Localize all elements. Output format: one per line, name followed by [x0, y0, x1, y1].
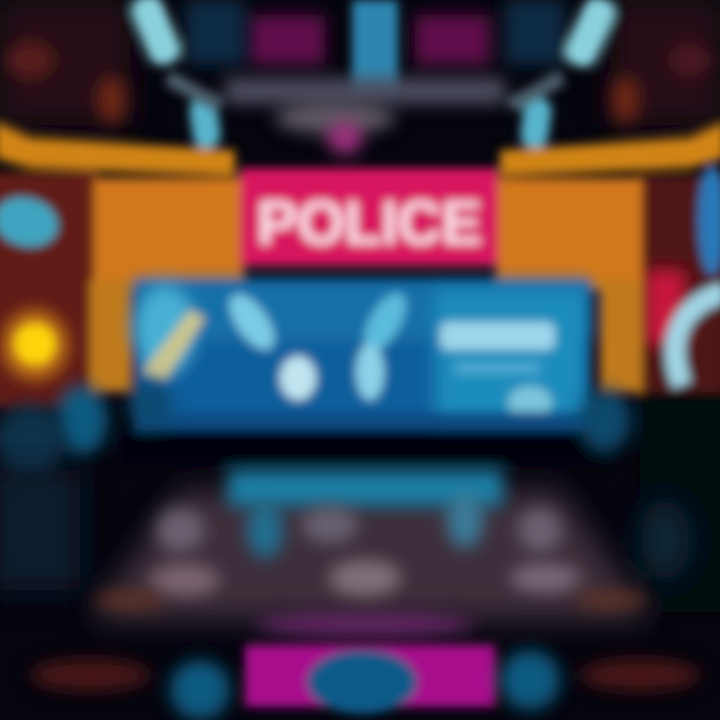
orange panels [90, 178, 642, 392]
pink sign [240, 168, 498, 266]
sign text: POLICE [257, 189, 481, 258]
cyan ceiling lights [128, 0, 619, 150]
left wall panel [0, 172, 98, 407]
right wall panel [636, 165, 720, 395]
left silhouettes [0, 380, 172, 590]
magenta bottom floor [30, 613, 700, 720]
dark counter [120, 432, 610, 466]
right silhouettes [579, 388, 720, 612]
blue screen [135, 280, 590, 430]
floor [90, 470, 650, 620]
orange beams [0, 122, 720, 176]
ceiling [0, 0, 720, 154]
